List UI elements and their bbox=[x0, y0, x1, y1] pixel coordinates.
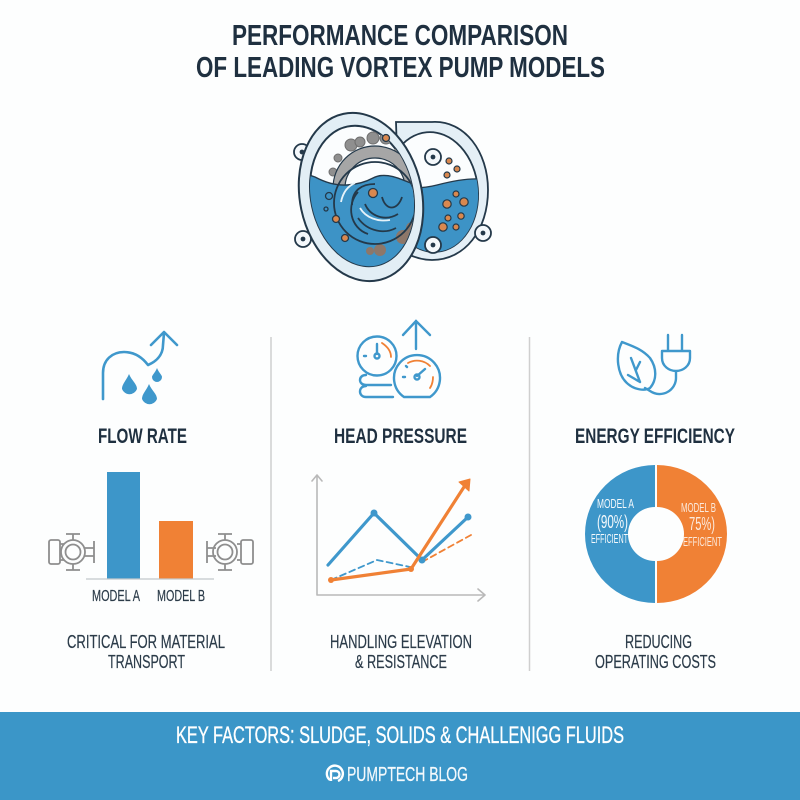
divider bbox=[270, 337, 272, 671]
donut chart: energy efficiency: MODEL B bbox=[681, 500, 716, 515]
pump mounting lugs bbox=[294, 144, 491, 253]
footer brand: PUMPTECH BLOG bbox=[347, 764, 468, 786]
icon: pressure gauges bbox=[358, 321, 440, 397]
caption: head pressure bbox=[330, 632, 472, 672]
icon: flow arrow and drops bbox=[103, 332, 177, 404]
icon: right valve bbox=[207, 534, 253, 570]
heading: flow rate: FLOW RATE bbox=[98, 425, 187, 448]
bar chart: flow rate: MODEL B bbox=[157, 588, 205, 605]
pump illustration bbox=[293, 112, 492, 282]
divider bbox=[528, 337, 530, 671]
title bbox=[196, 20, 605, 84]
caption: energy efficiency bbox=[595, 632, 716, 672]
heading: energy efficiency: ENERGY EFFICIENCY bbox=[575, 425, 735, 448]
donut chart: energy efficiency: EFFICIENT bbox=[591, 531, 628, 546]
bar chart: flow rate bbox=[86, 472, 214, 605]
icon: blog logo bbox=[327, 766, 343, 781]
caption: flow rate: TRANSPORT bbox=[108, 652, 185, 672]
icon: leaf and plug bbox=[618, 335, 690, 394]
caption: energy efficiency: OPERATING COSTS bbox=[595, 652, 716, 672]
caption: flow rate: CRITICAL FOR MATERIAL bbox=[67, 632, 225, 652]
pump back housing bbox=[395, 121, 489, 261]
title: PERFORMANCE COMPARISON bbox=[232, 20, 568, 52]
icon: left valve bbox=[49, 534, 94, 570]
donut chart: energy efficiency: 75%) bbox=[689, 514, 715, 534]
pump front ring bbox=[298, 112, 424, 282]
donut chart: energy efficiency: MODEL A bbox=[597, 496, 634, 511]
panel: energy efficiency bbox=[575, 335, 735, 672]
caption: head pressure: & RESISTANCE bbox=[355, 652, 447, 672]
donut chart: energy efficiency: EFFICIENT bbox=[683, 534, 722, 549]
caption: energy efficiency: REDUCING bbox=[625, 632, 692, 652]
caption: head pressure: HANDLING ELEVATION bbox=[330, 632, 472, 652]
bar chart: flow rate: MODEL A bbox=[92, 588, 140, 605]
donut chart: energy efficiency bbox=[585, 465, 727, 603]
heading: head pressure: HEAD PRESSURE bbox=[334, 425, 467, 448]
panel: head pressure bbox=[312, 321, 485, 672]
donut chart: energy efficiency: (90%) bbox=[597, 512, 628, 532]
caption: flow rate bbox=[67, 632, 225, 672]
title: OF LEADING VORTEX PUMP MODELS bbox=[196, 52, 605, 84]
footer band bbox=[0, 712, 800, 800]
panel: flow rate bbox=[49, 332, 253, 672]
line chart: head pressure bbox=[312, 475, 485, 601]
